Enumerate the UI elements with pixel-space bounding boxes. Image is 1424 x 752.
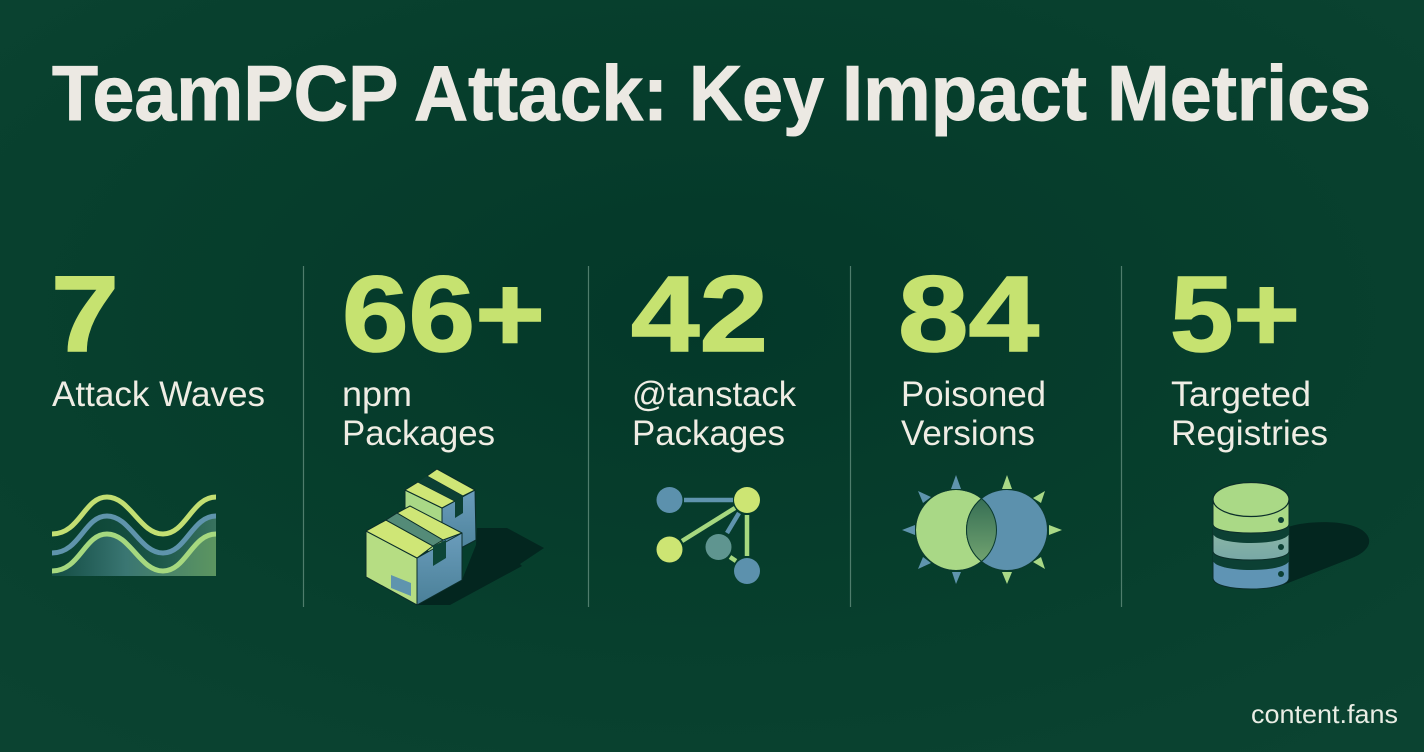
label: targeted registries bbox=[1171, 375, 1328, 453]
label: npm packages: Packages bbox=[342, 414, 495, 453]
label: npm packages: npm bbox=[342, 375, 412, 414]
label: tanstack packages: @tanstack bbox=[632, 375, 796, 414]
icon: cardboard boxes bbox=[366, 469, 544, 605]
panel: npm packages bbox=[342, 253, 545, 605]
label: tanstack packages bbox=[632, 375, 796, 453]
metric: 84: 84 bbox=[898, 253, 1039, 374]
panel: targeted registries bbox=[1170, 253, 1369, 589]
panel: tanstack packages bbox=[631, 253, 796, 584]
metric: 42: 42 bbox=[631, 253, 768, 374]
metric: 7: 7 bbox=[51, 253, 119, 374]
label: npm packages bbox=[342, 375, 495, 453]
panel: poisoned versions bbox=[898, 253, 1062, 584]
metric: 66+: 66+ bbox=[342, 253, 545, 374]
icon: wave chart bbox=[52, 497, 216, 576]
title: Metrics bbox=[1107, 49, 1371, 137]
label: poisoned versions bbox=[901, 375, 1046, 453]
title: Impact bbox=[842, 49, 1087, 137]
title: Attack: bbox=[414, 49, 668, 137]
label: poisoned versions: Versions bbox=[901, 414, 1035, 453]
title: Key bbox=[689, 49, 824, 137]
label: targeted registries: Registries bbox=[1171, 414, 1328, 453]
icon: network graph bbox=[656, 487, 760, 584]
title: TeamPCP bbox=[52, 49, 397, 137]
label: attack waves: Attack Waves bbox=[52, 375, 265, 414]
label: tanstack packages: Packages bbox=[632, 414, 785, 453]
label: targeted registries: Targeted bbox=[1171, 375, 1311, 414]
icon: venn diagram with spikes bbox=[902, 475, 1062, 584]
label: poisoned versions: Poisoned bbox=[901, 375, 1046, 414]
watermark: content.fans bbox=[1251, 699, 1398, 729]
panel: attack waves bbox=[51, 253, 265, 576]
metric: 5+: 5+ bbox=[1170, 253, 1300, 374]
icon: database cylinder bbox=[1213, 482, 1369, 589]
